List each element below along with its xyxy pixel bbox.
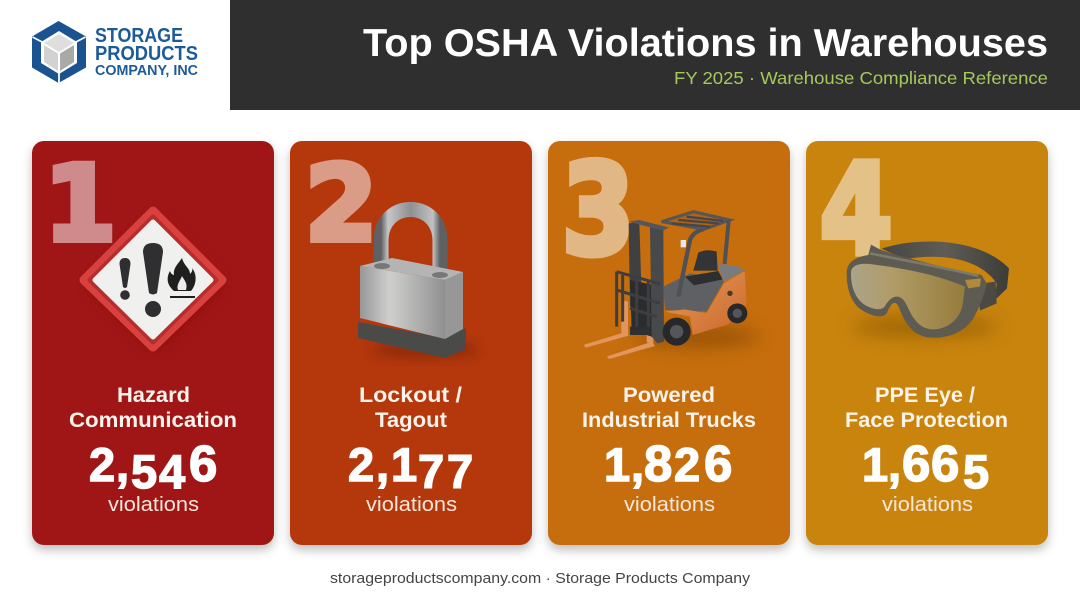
violation count: 5: [131, 445, 157, 498]
logo wordmark: [95, 25, 199, 79]
icon: padlock: [358, 210, 480, 359]
subtitle: FY 2025 · Warehouse Compliance Reference: [674, 68, 1048, 88]
violation count: ,: [116, 438, 129, 491]
violations label: violations: [624, 494, 715, 516]
violations label: violations: [108, 494, 199, 516]
violation count: 6: [704, 435, 732, 492]
panel: ppe eye face protection: [806, 138, 1048, 545]
card title: Powered: [623, 384, 715, 407]
card title: Lockout /: [359, 384, 462, 407]
card title: PPE Eye /: [875, 384, 975, 407]
violation count: 2: [348, 438, 374, 491]
icon: hexagonal box logo: [32, 21, 86, 83]
violation count: ,: [888, 438, 901, 491]
panel: ppe eye face protection: Face Protection: [845, 409, 1008, 432]
panel: powered industrial trucks: [548, 138, 790, 545]
icon: hazard diamond: [84, 211, 223, 351]
violation count: 8: [644, 435, 672, 492]
violation count: 2: [89, 438, 115, 491]
violation count: 1: [391, 438, 417, 491]
violation count: 6: [902, 435, 930, 492]
rank number 1: 1: [44, 143, 116, 265]
violation count: 4: [159, 445, 185, 498]
violation count: 1: [862, 438, 888, 491]
violation count: 5: [963, 445, 989, 498]
violation count: 2: [674, 438, 700, 491]
violation count: 7: [447, 445, 473, 498]
logo wordmark: COMPANY, INC: [95, 63, 199, 79]
panel: lockout tagout: Tagout: [375, 409, 447, 432]
violations label: violations: [366, 494, 457, 516]
header banner: [230, 0, 1080, 110]
violation count: 6: [189, 435, 217, 492]
icon: safety goggles: [847, 242, 1009, 338]
panel: hazard communication: [32, 141, 274, 545]
rank number 3: 3: [562, 138, 634, 283]
violation count: ,: [631, 438, 644, 491]
violation count: 1: [604, 438, 630, 491]
violations label: violations: [882, 494, 973, 516]
footer: storageproductscompany.com · Storage Products Company: [330, 570, 751, 587]
panel: hazard communication: Communication: [69, 409, 237, 432]
panel: powered industrial trucks: Industrial Trucks: [582, 409, 756, 432]
panel: lockout tagout: [290, 141, 532, 545]
logo: [32, 21, 199, 83]
card title: Hazard: [117, 384, 190, 407]
violation count: 6: [931, 435, 959, 492]
icon: forklift: [583, 212, 760, 359]
violation count: ,: [376, 438, 389, 491]
violation count: 7: [418, 445, 444, 498]
title: Top OSHA Violations in Warehouses: [363, 22, 1048, 65]
rank number 2: 2: [305, 143, 377, 265]
rank number 4: 4: [820, 138, 892, 283]
logo wordmark: PRODUCTS: [95, 43, 198, 65]
logo wordmark: STORAGE: [95, 25, 183, 47]
